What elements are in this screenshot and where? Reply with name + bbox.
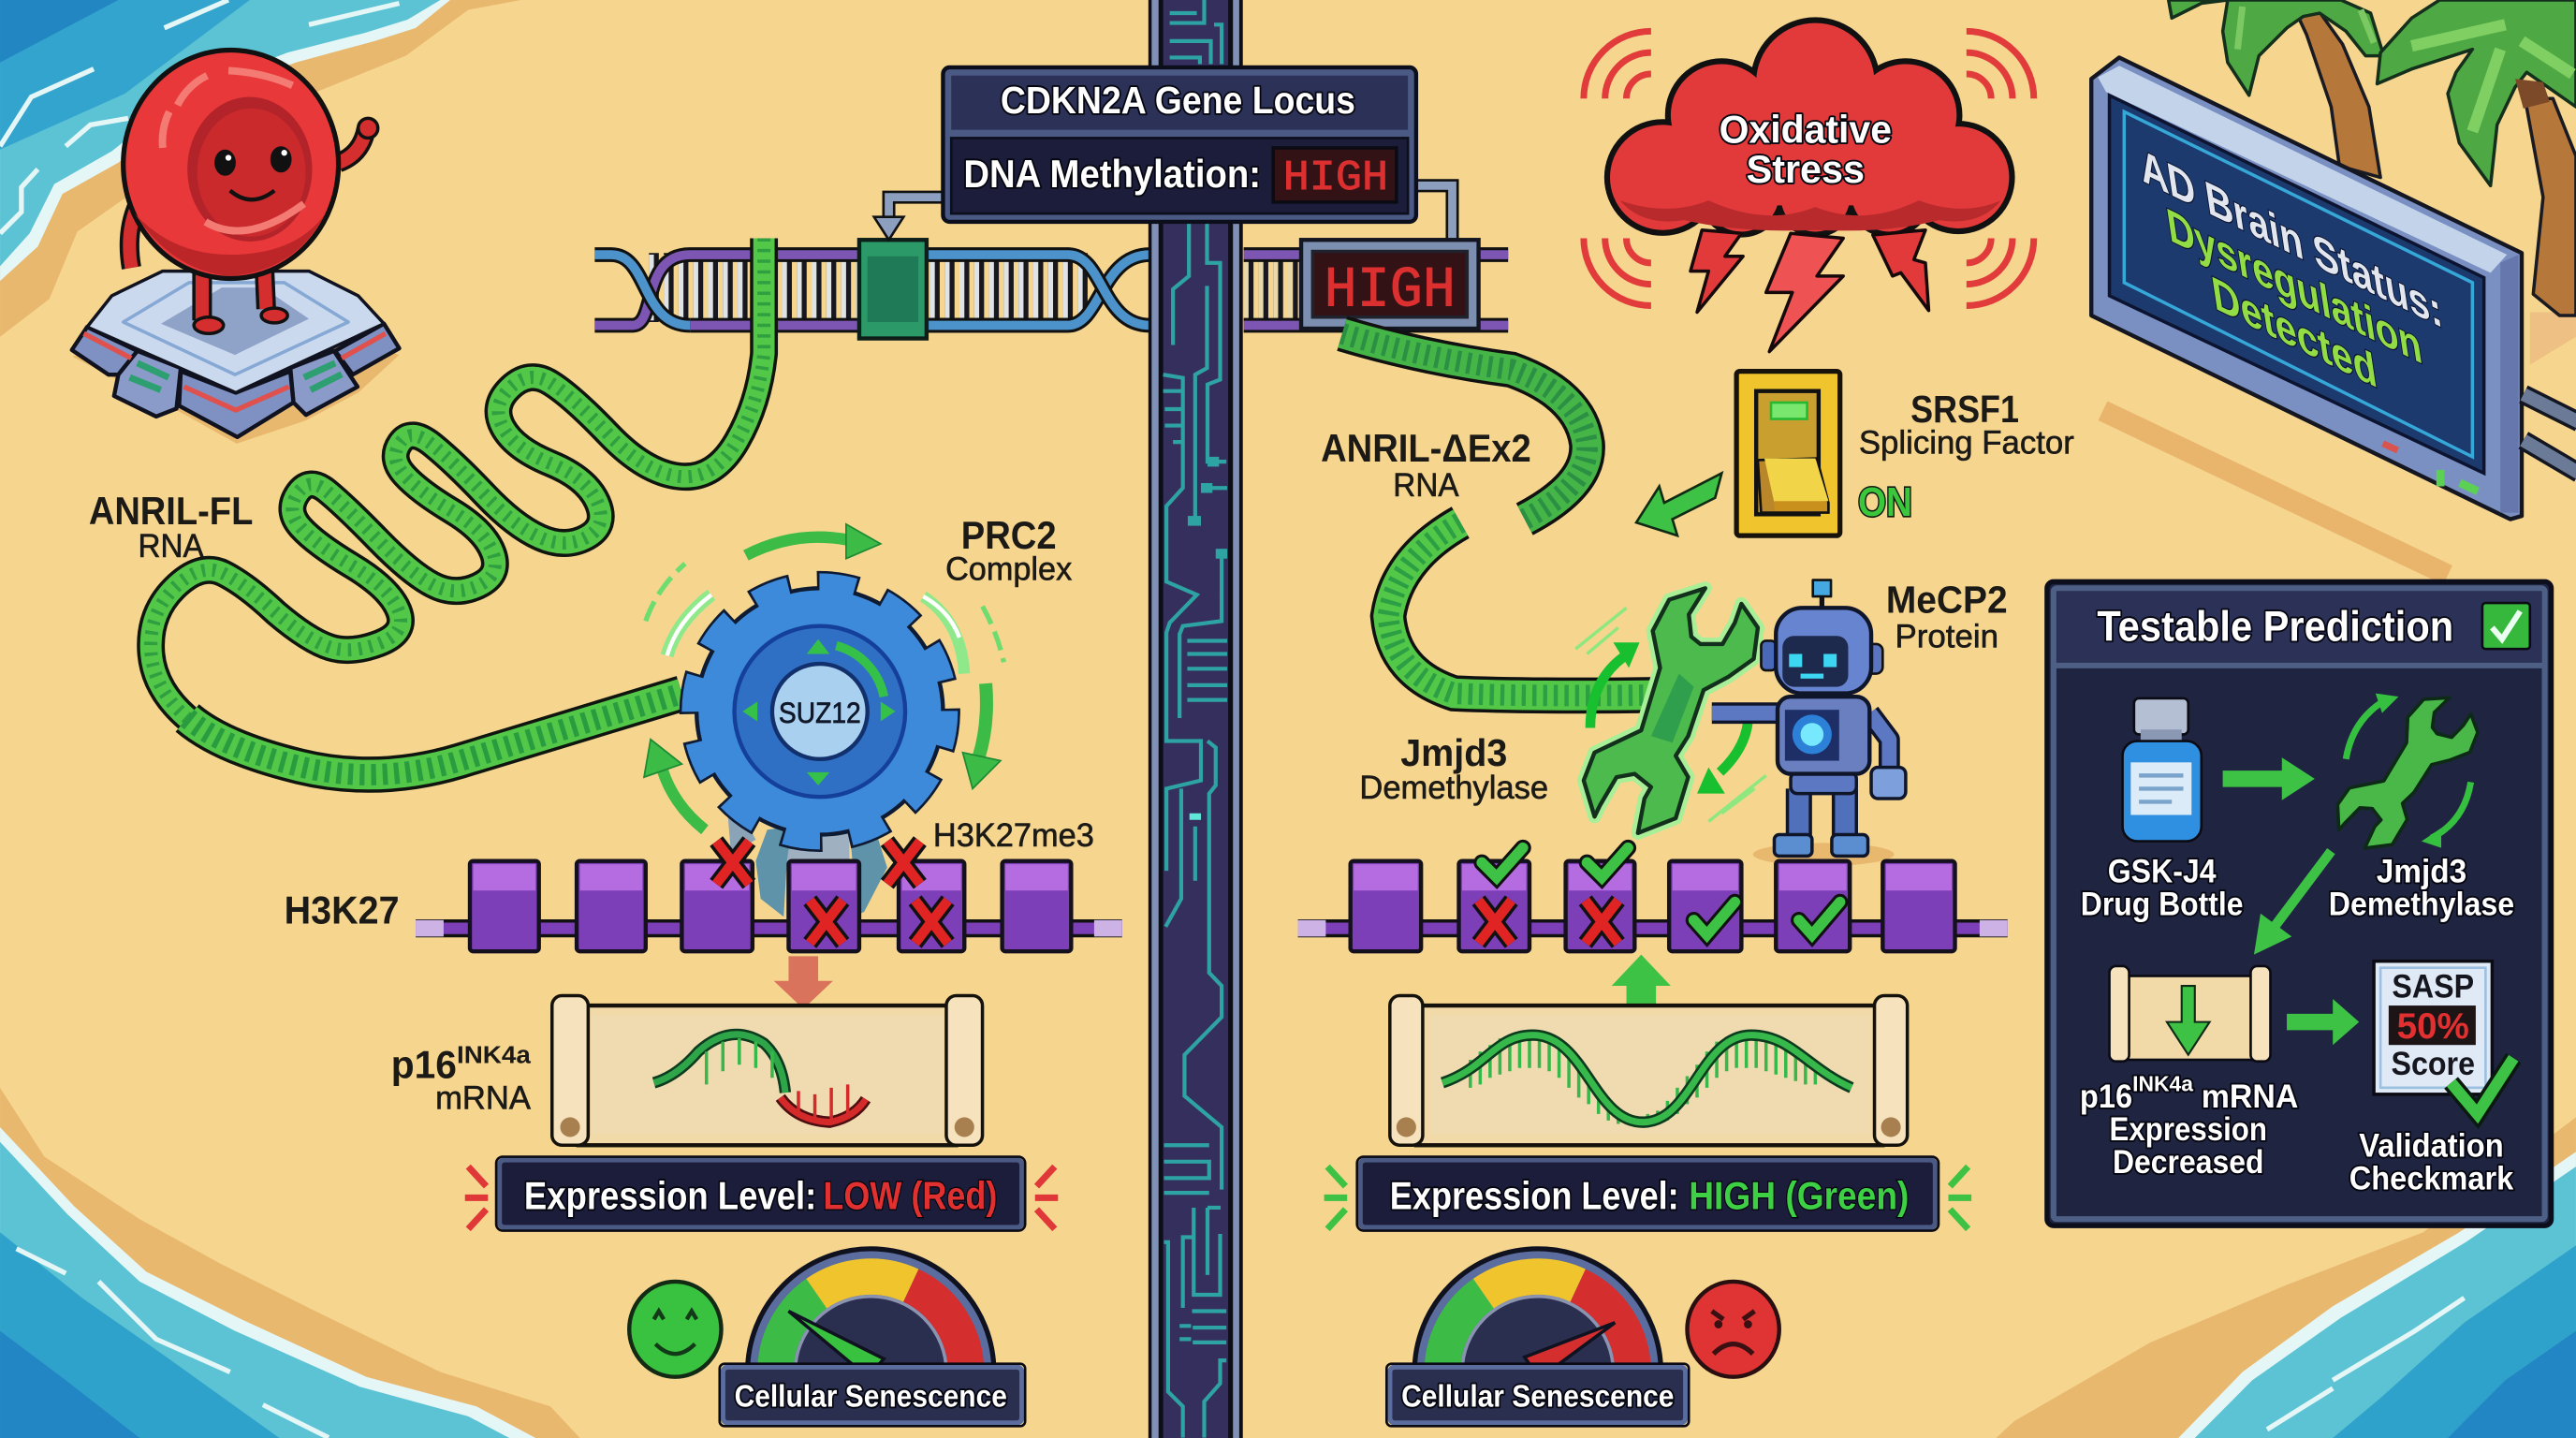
- water: top-left shore: [0, 0, 520, 337]
- label: p16INK4a mRNA Expression Decreased: mRNA: [2202, 1078, 2298, 1115]
- histone row: left: [416, 861, 1122, 951]
- banner: expression level high: HIGH (Green): [1689, 1174, 1909, 1218]
- label: PRC2 Complex: PRC2: [961, 513, 1057, 557]
- text: AD Brain Status: AD Brain Status:: [2136, 139, 2446, 339]
- arrow: wrench to scroll: [2254, 851, 2331, 955]
- label: ANRIL-dEx2 RNA: [1321, 426, 1531, 504]
- label: p16INK4a mRNA left: INK4a: [457, 1041, 531, 1069]
- label: MeCP2 Protein: Protein: [1895, 618, 1998, 654]
- label: ANRIL-FL RNA: [89, 489, 253, 565]
- label: ANRIL-dEx2 RNA: ANRIL-ΔEx2: [1321, 426, 1531, 470]
- ANRIL-dEx2 ribbon: upper exon: [1342, 333, 1588, 520]
- label: Jmjd3 Demethylase panel: Demethylase: [2329, 887, 2514, 923]
- icon: validation check: [2452, 1058, 2513, 1114]
- ANRIL-FL RNA ribbon: [151, 238, 764, 774]
- chip platform: [72, 271, 400, 444]
- label: p16INK4a mRNA Expression Decreased: Expression: [2110, 1111, 2267, 1148]
- icon: GSK-J4 vial: [2123, 698, 2202, 842]
- arrows: rotating around PRC2: [644, 524, 1003, 829]
- marks: red alert ticks: [465, 1167, 1058, 1229]
- gauge: cellular senescence high: [1386, 1249, 1689, 1426]
- scroll: right, high expression: [1390, 996, 1908, 1145]
- central circuit column: [1149, 0, 1243, 1438]
- arrows: wrench rotating: [1575, 608, 1766, 822]
- arrow: splicing switch to ribbon: [1636, 473, 1721, 536]
- arrow: expression up: [1612, 955, 1671, 1007]
- heading: Testable Prediction: Testable Prediction: [2097, 602, 2453, 650]
- label: p16INK4a mRNA Expression Decreased: p16: [2080, 1078, 2132, 1115]
- label: SRSF1 Splicing Factor ON: Splicing Factor: [1859, 424, 2074, 461]
- marks: green alert ticks: [1325, 1167, 1971, 1229]
- label: Jmjd3 Demethylase: Demethylase: [1359, 770, 1548, 806]
- card: SASP Score 50%: 50%: [2397, 1006, 2469, 1047]
- water: bottom-left shore: [0, 1088, 580, 1438]
- card: SASP Score 50%: Score: [2392, 1046, 2475, 1082]
- DNA helix: right segment: [1244, 255, 1508, 325]
- label: p16INK4a mRNA left: [391, 1041, 532, 1117]
- arrow: repression down: [774, 956, 833, 1009]
- PRC2 gear with SUZ12: [692, 583, 948, 840]
- icon: Oxidative Stress cloud: [1608, 22, 2011, 233]
- label: Cellular Senescence: Cellular Senescence: [1401, 1379, 1674, 1414]
- display: HIGH on DNA: [1301, 240, 1479, 329]
- connector: locus box to gene block: [874, 198, 944, 240]
- scroll: left, low expression: [552, 996, 983, 1145]
- marks: H3K27me3 red crosses: [716, 842, 948, 943]
- icon: red frowny: [1687, 1282, 1779, 1377]
- monitor cables: [2524, 394, 2576, 473]
- label: Jmjd3 Demethylase panel: [2329, 853, 2514, 923]
- label: GSK-J4 Drug Bottle: GSK-J4: [2108, 853, 2217, 889]
- label: DNA Methylation: DNA Methylation:: [963, 152, 1261, 196]
- sand shadow stripe: [2102, 411, 2448, 575]
- arms and legs: [129, 128, 366, 320]
- label: Validation Checkmark: Validation: [2359, 1128, 2504, 1165]
- banner: expression level high: Expression Level:: [1390, 1174, 1679, 1218]
- histone row: right: [1298, 861, 2008, 951]
- label: H3K27: H3K27: [285, 888, 400, 932]
- icon: MeCP2 robot: [1712, 580, 1906, 866]
- icon: Jmjd3 wrench: [1584, 588, 1758, 833]
- banner: expression level high: [1357, 1157, 1939, 1231]
- label: SRSF1 Splicing Factor ON: [1858, 388, 2074, 525]
- ANRIL-dEx2 ribbon: lower exon: [1388, 522, 1656, 696]
- label: MeCP2 Protein: MeCP2: [1886, 579, 2008, 622]
- label: SRSF1 Splicing Factor ON: SRSF1: [1910, 388, 2019, 431]
- card: SASP Score 50%: SASP: [2392, 968, 2474, 1005]
- label: GSK-J4 Drug Bottle: [2081, 853, 2244, 923]
- water: bottom-right shore: [1996, 1117, 2576, 1438]
- arrow: scroll to SASP: [2287, 999, 2359, 1045]
- label: Validation Checkmark: Checkmark: [2349, 1161, 2514, 1197]
- text: Detected: Detected: [2208, 266, 2380, 399]
- label: SUZ12: SUZ12: [779, 696, 861, 729]
- label: PRC2 Complex: [945, 513, 1073, 588]
- display: HIGH on DNA: HIGH: [1325, 258, 1456, 323]
- card: SASP Score 50%: [2374, 961, 2492, 1094]
- icon: Oxidative Stress cloud: Stress: [1747, 147, 1865, 191]
- PRC2 clamp: [728, 814, 887, 917]
- label: p16INK4a mRNA left: p16: [391, 1042, 457, 1086]
- monitor: AD Brain Status: [2091, 57, 2522, 520]
- banner: expression level low: LOW (Red): [823, 1174, 997, 1218]
- label: ANRIL-FL RNA: RNA: [138, 528, 204, 565]
- icon: small scroll: [2110, 966, 2271, 1062]
- label: H3K27me3: H3K27me3: [933, 817, 1094, 854]
- label: Jmjd3 Demethylase: Jmjd3: [1400, 731, 1507, 774]
- label: Validation Checkmark: [2349, 1128, 2514, 1197]
- heading: CDKN2A Gene Locus: CDKN2A Gene Locus: [1001, 79, 1355, 122]
- label: p16INK4a mRNA Expression Decreased: [2080, 1071, 2298, 1181]
- DNA helix: left segment: [594, 255, 1150, 325]
- text: Oxidative Stress: Oxidative: [1720, 108, 1892, 152]
- label: Jmjd3 Demethylase panel: Jmjd3: [2377, 853, 2466, 889]
- label: Cellular Senescence: Cellular Senescence: [735, 1379, 1007, 1414]
- label: MeCP2 Protein: [1886, 579, 2008, 654]
- icon: header check: [2482, 603, 2530, 649]
- arrow: vial to wrench: [2223, 757, 2315, 800]
- panel: CDKN2A Gene Locus: [943, 67, 1416, 222]
- icon: SRSF1 toggle switch: [1736, 372, 1840, 536]
- DNA gene block: green: [859, 240, 927, 339]
- label: GSK-J4 Drug Bottle: Drug Bottle: [2081, 887, 2244, 923]
- label: p16INK4a mRNA Expression Decreased: INK4a: [2132, 1071, 2193, 1095]
- banner: expression level low: [496, 1157, 1025, 1231]
- label: PRC2 Complex: Complex: [945, 551, 1073, 588]
- icon: green smiley: [629, 1282, 722, 1377]
- connector: locus box to HIGH display: [1412, 185, 1453, 240]
- palm trees: [2169, 0, 2576, 365]
- label: SRSF1 Splicing Factor ON: ON: [1858, 479, 1912, 525]
- label: Jmjd3 Demethylase: [1359, 731, 1548, 806]
- text: Dysregulation: Dysregulation: [2163, 198, 2425, 374]
- banner: expression level low: Expression Level:: [524, 1174, 816, 1218]
- label: p16INK4a mRNA Expression Decreased: Decreased: [2113, 1144, 2263, 1181]
- blood cell mascot on chip: [72, 51, 400, 444]
- marks: green checkmarks on right row: [1482, 848, 1840, 935]
- icon: lightning bolts: [1690, 230, 1928, 352]
- label: ANRIL-dEx2 RNA: RNA: [1393, 467, 1459, 504]
- label: ANRIL-FL RNA: ANRIL-FL: [89, 489, 253, 533]
- icon: red signal arcs: [1584, 31, 2034, 305]
- panel: Testable Prediction: [2047, 581, 2552, 1225]
- body: [124, 51, 339, 278]
- label: p16INK4a mRNA left: mRNA: [435, 1080, 532, 1117]
- display: HIGH: HIGH: [1283, 154, 1388, 202]
- face: [214, 150, 236, 176]
- marks: red crosses on right row: [1479, 901, 1618, 943]
- gauge: cellular senescence low: [720, 1249, 1025, 1426]
- icon: small Jmjd3 wrench: [2329, 678, 2484, 868]
